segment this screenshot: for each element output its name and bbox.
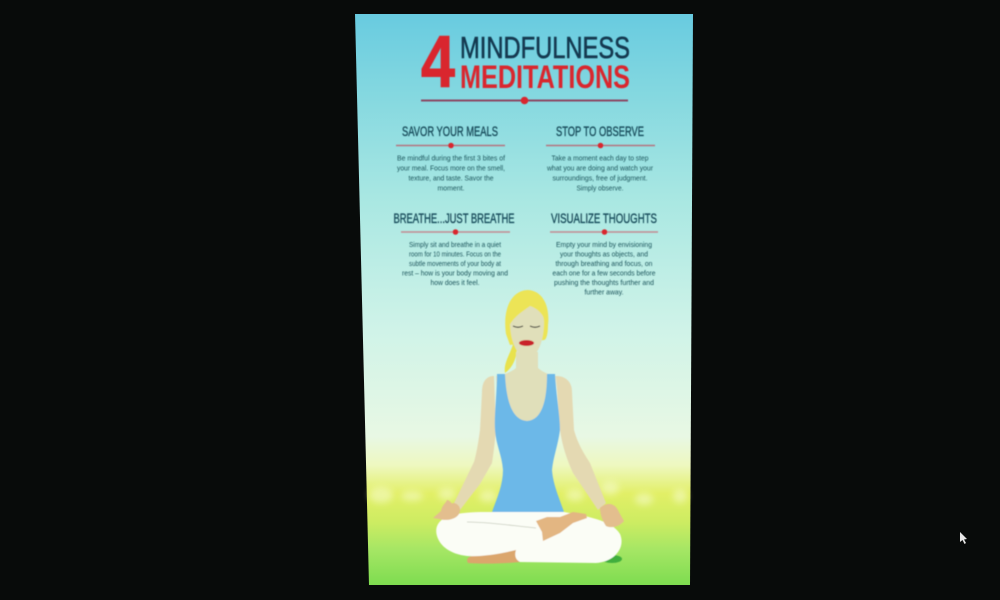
body text: through breathing and focus, on — [556, 259, 652, 268]
body text: subtle movements of your body at — [409, 259, 501, 268]
heading: VISUALIZE THOUGHTS — [551, 210, 657, 226]
hair back — [505, 290, 548, 345]
body text: what you are doing and watch your — [546, 164, 653, 172]
left arm — [454, 376, 496, 510]
ponytail — [505, 340, 517, 373]
eye right — [530, 326, 540, 327]
body text: your thoughts as objects, and — [560, 250, 648, 258]
body text: moment. — [438, 184, 464, 192]
body text — [546, 154, 653, 192]
title line: meditations: MEDITATIONS — [460, 59, 630, 95]
face — [510, 305, 544, 358]
lips — [519, 340, 534, 346]
divider — [546, 143, 655, 148]
body text: further away. — [584, 288, 624, 296]
illustration: meditating woman — [433, 290, 624, 564]
title — [421, 22, 630, 103]
upper foot — [536, 512, 587, 541]
lower foot — [467, 549, 520, 564]
body text: Simply sit and breathe in a quiet — [409, 240, 501, 249]
body text: each one for a few seconds before — [552, 268, 656, 278]
body text: surroundings, free of judgment. — [552, 174, 648, 182]
body text: pushing the thoughts further and — [554, 278, 654, 287]
divider — [396, 143, 505, 148]
body text — [402, 240, 508, 287]
mouse cursor — [960, 532, 967, 544]
ground shadow — [602, 555, 622, 563]
heading: STOP TO OBSERVE — [556, 123, 644, 139]
right hand — [600, 504, 624, 527]
body text: Take a moment each day to step — [552, 154, 648, 162]
eye left — [513, 326, 523, 327]
title numeral 4: 4 — [421, 22, 455, 103]
heading: BREATHE...JUST BREATHE — [394, 210, 514, 226]
title divider — [421, 97, 628, 104]
bokeh lights — [369, 481, 687, 505]
panel: visualize thoughts — [550, 210, 658, 296]
body text: Empty your mind by envisioning — [556, 240, 652, 249]
body text — [552, 240, 656, 296]
body text: room for 10 minutes. Focus on the — [409, 250, 501, 258]
hair fringe — [508, 298, 546, 328]
body text: your meal. Focus more on the smell, — [397, 164, 505, 172]
tank top — [492, 374, 564, 512]
body text: Be mindful during the first 3 bites of — [397, 154, 506, 162]
body text — [397, 154, 506, 192]
panel: stop to observe — [546, 123, 655, 192]
legs in white trousers — [436, 512, 622, 563]
heading: SAVOR YOUR MEALS — [402, 123, 498, 139]
title line: mindfulness: MINDFULNESS — [460, 30, 630, 65]
divider — [550, 229, 658, 235]
body text: how does it feel. — [430, 278, 480, 287]
body text: texture, and taste. Savor the — [408, 174, 494, 182]
body text: Simply observe. — [576, 184, 624, 192]
right arm — [556, 376, 606, 510]
trouser crease — [467, 522, 536, 528]
neck and chest — [496, 352, 556, 422]
body text: rest – how is your body moving and — [402, 268, 508, 278]
panel: savor your meals — [396, 123, 506, 192]
panel: breathe — [394, 210, 514, 287]
panel: infographic screen — [355, 14, 693, 585]
left hand — [433, 500, 460, 520]
divider — [401, 229, 510, 235]
